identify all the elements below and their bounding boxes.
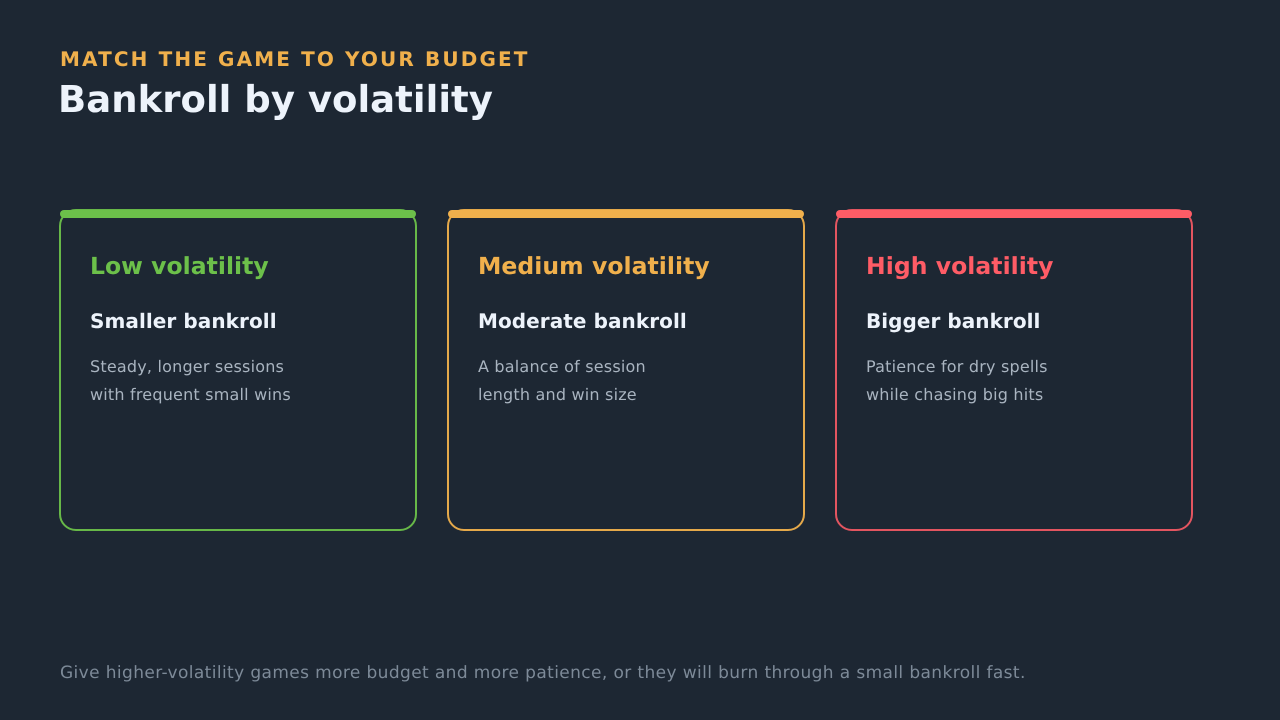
card description: medium: A balance of session: [478, 357, 646, 376]
accent bar: high: [836, 210, 1192, 218]
card subheading: low: Smaller bankroll: [90, 309, 277, 333]
card subheading: high: Bigger bankroll: [866, 309, 1040, 333]
card subheading: medium: Moderate bankroll: [478, 309, 687, 333]
panel: medium volatility: [448, 210, 804, 530]
card description: high: [866, 357, 1048, 404]
eyebrow heading: MATCH THE GAME TO YOUR BUDGET: [60, 47, 530, 71]
title: Bankroll by volatility: [58, 78, 493, 121]
card heading: low: Low volatility: [90, 252, 269, 280]
footer note: Give higher-volatility games more budget and more patience, or they will burn through a small bankroll fast.: [60, 663, 1026, 683]
card description: high: Patience for dry spells: [866, 357, 1048, 376]
panel: high volatility: [836, 210, 1192, 530]
card description: medium: length and win size: [478, 385, 637, 404]
panel: low volatility: [60, 210, 416, 530]
accent bar: low: [60, 210, 416, 218]
card heading: high: High volatility: [866, 252, 1054, 280]
card description: high: while chasing big hits: [866, 385, 1043, 404]
card description: medium: [478, 357, 646, 404]
card outline: medium: [448, 210, 804, 530]
card outline: low: [60, 210, 416, 530]
card outline: high: [836, 210, 1192, 530]
card heading: medium: Medium volatility: [478, 252, 710, 280]
card description: low: [90, 357, 291, 404]
card description: low: with frequent small wins: [90, 385, 291, 404]
accent bar: medium: [448, 210, 804, 218]
card description: low: Steady, longer sessions: [90, 357, 284, 376]
